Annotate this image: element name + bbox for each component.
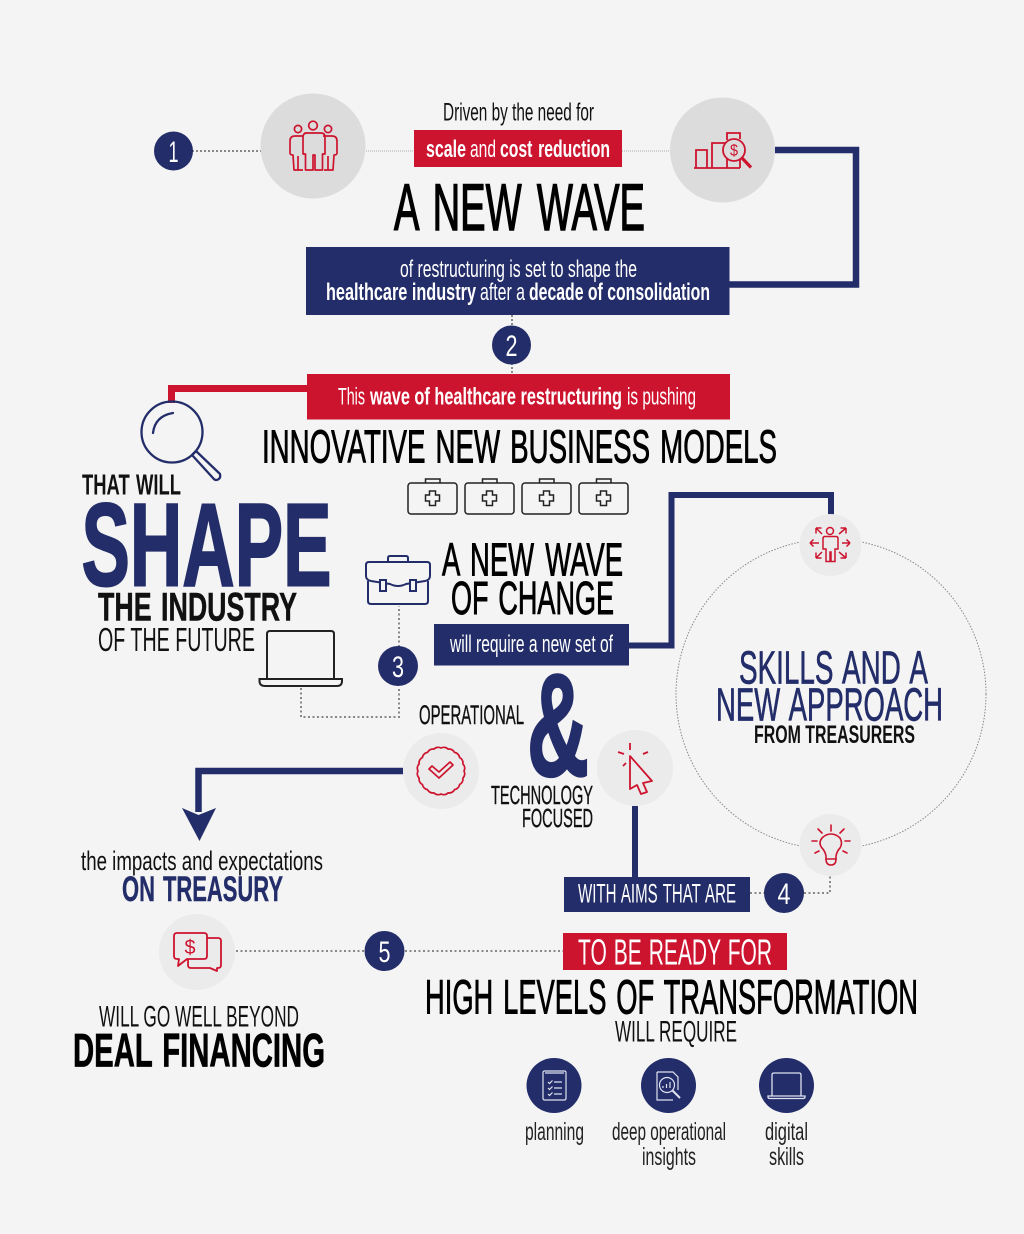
dotted connector: step 5	[236, 950, 563, 952]
navy connector: to skills	[629, 495, 831, 646]
red banner: wave of healthcare restructuring: This	[338, 384, 365, 410]
navy banner: restructuring: after a	[480, 279, 525, 306]
label: digital skills	[765, 1118, 808, 1171]
red banner: to be ready for: TO BE READY FOR	[578, 932, 772, 972]
step 5 badge: 5	[378, 936, 390, 969]
intro text: Driven by the need for	[443, 98, 594, 126]
icon: laptop	[260, 631, 342, 686]
navy banner: will require a new set of: will require a new set of	[449, 631, 613, 658]
red banner: scale and cost reduction: cost reduction	[500, 136, 610, 163]
icon: magnifying glass	[142, 402, 220, 480]
label: digital skills: digital	[765, 1118, 808, 1146]
step 2 badge	[492, 326, 531, 364]
heading: a new wave of change: A NEW WAVE	[442, 534, 623, 586]
step 1 badge: 1	[168, 136, 178, 169]
icon: light bulb	[800, 814, 862, 876]
icon: planning checklist	[526, 1058, 582, 1113]
heading: that will shape the industry of the future: THAT WILL	[82, 470, 181, 502]
step 2 badge: 2	[506, 330, 518, 363]
step 3 badge	[378, 646, 418, 686]
icon: person with arrows	[800, 514, 862, 576]
icon: group of people	[260, 94, 366, 198]
text: technology focused: TECHNOLOGY	[491, 780, 593, 810]
icon: bar chart with dollar magnifier: $	[730, 142, 738, 160]
label: deep operational insights: insights	[642, 1143, 696, 1171]
red banner: wave of healthcare restructuring: is pushing	[627, 384, 696, 410]
red banner: wave of healthcare restructuring	[307, 374, 730, 420]
step 4 badge	[764, 873, 804, 913]
text: technology focused	[491, 780, 593, 833]
navy banner: restructuring	[306, 247, 730, 315]
navy banner: restructuring: healthcare industry	[326, 279, 476, 306]
label: planning: planning	[525, 1118, 584, 1146]
step 3 badge: 3	[392, 651, 404, 684]
heading: a new wave of change: OF CHANGE	[451, 572, 614, 624]
icon: digital laptop	[759, 1058, 814, 1113]
step 1 badge	[154, 132, 193, 170]
navy banner: with aims that are	[564, 877, 750, 912]
heading: a new wave of change	[442, 534, 623, 624]
icon: check badge	[403, 733, 479, 809]
icon: bar chart with dollar magnifier	[670, 98, 775, 202]
red banner: wave of healthcare restructuring: wave of healthcare restructuring	[369, 384, 622, 410]
navy banner: with aims that are: WITH AIMS THAT ARE	[578, 878, 736, 908]
navy banner: will require a new set of	[434, 624, 629, 666]
text: impacts on treasury	[81, 846, 323, 909]
label: deep operational insights	[612, 1118, 726, 1171]
icon: briefcase	[366, 556, 430, 604]
heading: that will shape the industry of the future: OF THE FUTURE	[98, 622, 255, 659]
heading: skills and a new approach from treasurers	[716, 642, 943, 749]
text: operational: OPERATIONAL	[419, 700, 524, 730]
text: will go well beyond deal financing: DEAL FINANCING	[73, 1024, 325, 1076]
text: will require: WILL REQUIRE	[615, 1016, 737, 1048]
text: impacts on treasury: the impacts and expectations	[81, 846, 323, 876]
navy banner: restructuring: decade of consolidation	[529, 279, 710, 306]
red connector	[172, 388, 307, 403]
navy connector: to aims	[632, 806, 638, 878]
navy banner: restructuring: of restructuring is set to shape the	[400, 256, 637, 283]
text: will go well beyond deal financing	[73, 1000, 325, 1076]
icon: document with magnifier	[641, 1058, 696, 1113]
dotted connector: step 1	[192, 150, 262, 152]
red banner: scale and cost reduction	[414, 130, 622, 167]
navy connector: top right	[729, 150, 856, 284]
red banner: scale and cost reduction: scale	[426, 136, 466, 163]
step 4 badge: 4	[778, 878, 790, 911]
heading: that will shape the industry of the future: THE INDUSTRY	[98, 586, 297, 630]
navy arrow: to treasury	[182, 771, 403, 841]
heading: skills and a new approach from treasurers: FROM TREASURERS	[754, 721, 915, 749]
heading: that will shape the industry of the future	[82, 470, 332, 659]
dotted circle around skills	[676, 539, 986, 849]
red banner: scale and cost reduction: and	[470, 136, 496, 163]
text: impacts on treasury: ON TREASURY	[122, 870, 283, 909]
icon: chat with dollar: $	[184, 937, 196, 959]
icon: chat with dollar	[159, 914, 235, 990]
heading: that will shape the industry of the future: SHAPE	[82, 480, 332, 612]
text: technology focused: FOCUSED	[522, 803, 593, 833]
icons: four medical kits	[408, 479, 628, 514]
icon: cursor click	[597, 730, 673, 806]
thin dotted line across top row	[366, 150, 670, 152]
label: deep operational insights: deep operational	[612, 1118, 726, 1146]
step 5 badge	[364, 931, 404, 971]
red banner: to be ready for	[563, 932, 787, 972]
heading: a new wave: A NEW WAVE	[394, 171, 645, 244]
dotted connector: step 3	[301, 606, 399, 717]
dotted connector: step 2	[511, 315, 513, 374]
dotted connector: step 4	[750, 876, 830, 893]
text: will go well beyond deal financing: WILL GO WELL BEYOND	[99, 1000, 299, 1034]
ampersand: &	[527, 644, 589, 806]
label: digital skills: skills	[769, 1143, 804, 1171]
